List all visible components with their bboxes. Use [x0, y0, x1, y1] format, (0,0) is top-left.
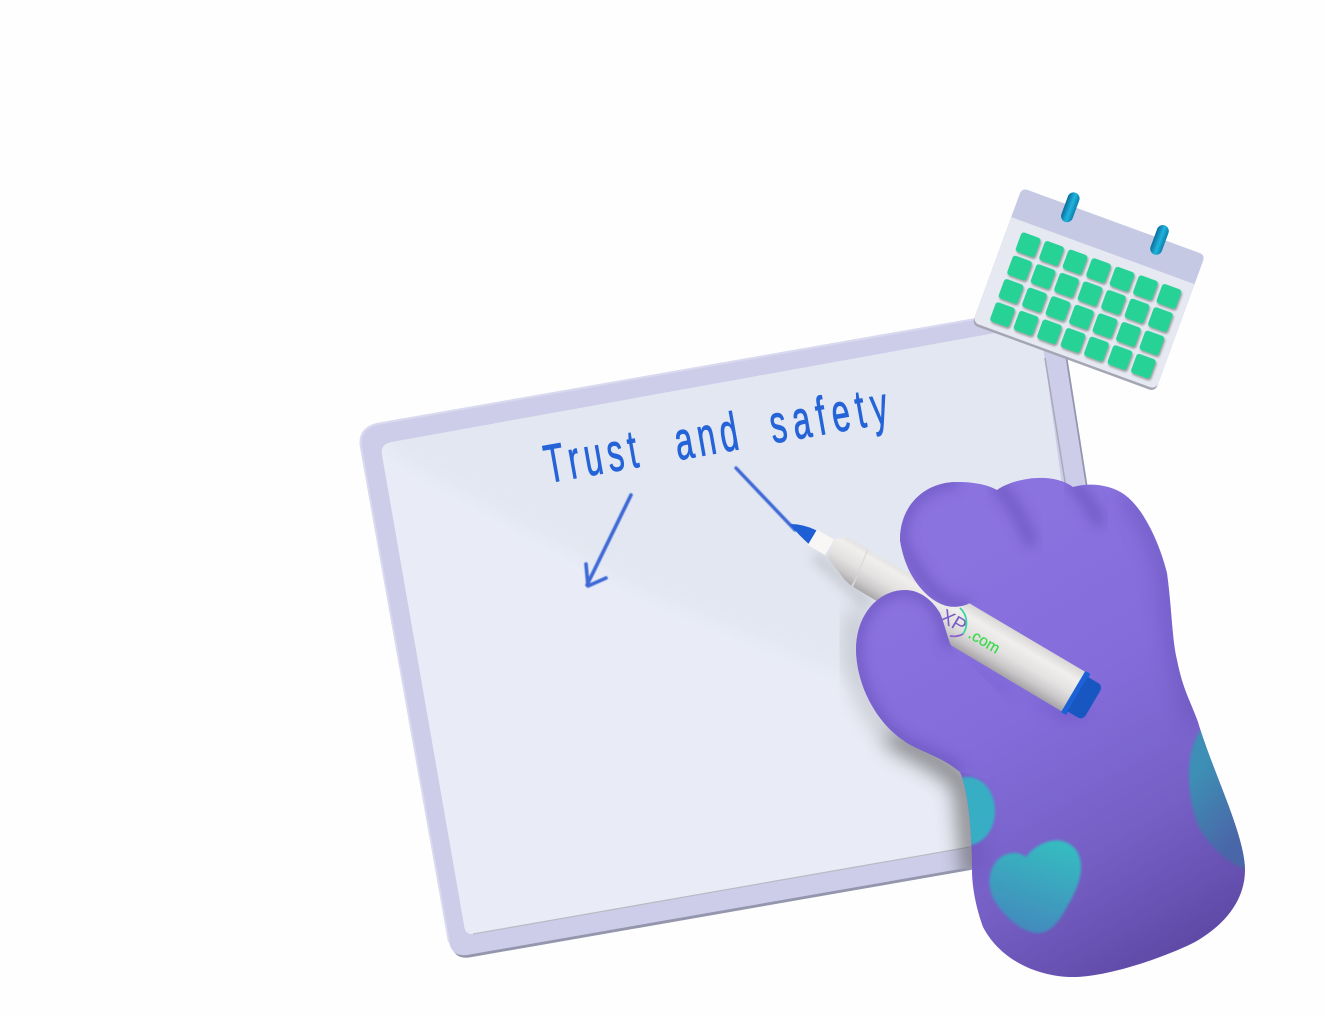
logo ring [960, 608, 966, 634]
calendar [972, 175, 1210, 392]
hand silhouette [856, 478, 1245, 977]
pen domain text: .com [965, 626, 1003, 657]
surface lower edge [473, 847, 970, 934]
right spot [1188, 729, 1245, 870]
arrow pointing down-left [586, 495, 631, 586]
board frame [360, 305, 1088, 955]
pen logo letters: XP [936, 605, 970, 638]
board surface [382, 325, 1083, 934]
left spot [962, 776, 996, 846]
handwritten title [540, 376, 893, 495]
pen barrel [847, 545, 1086, 712]
logo ring lower [950, 634, 963, 636]
handwritten title: safety [765, 376, 893, 455]
hand shadow lower [890, 735, 975, 880]
date grid [989, 232, 1182, 379]
hand shading and heart spots [960, 495, 1245, 934]
surface sheen and shadows [380, 300, 1110, 880]
pen nib [786, 517, 818, 545]
grip section [818, 531, 871, 586]
pen end cap [1067, 677, 1103, 720]
frame highlight [361, 306, 1050, 942]
pen shadow on board [815, 555, 870, 605]
thumb edge shading [856, 590, 960, 772]
thumb shadow [854, 610, 890, 735]
handwritten title: Trust [540, 420, 643, 495]
drawn ink line [736, 468, 795, 530]
whiteboard [360, 300, 1110, 958]
calendar edge shadow [972, 189, 1205, 392]
marker pen [736, 468, 1105, 724]
calendar header [1011, 188, 1205, 284]
pen cap flange [1061, 671, 1091, 715]
white collar [808, 529, 834, 555]
binder ring left [1059, 191, 1081, 224]
knuckle crease one [999, 488, 1030, 540]
calendar page [973, 188, 1205, 389]
pen body [778, 503, 1105, 724]
thumb [856, 590, 1020, 780]
grip step line [848, 550, 873, 587]
pen shadow on hand [1063, 714, 1064, 715]
handwritten title: and [670, 402, 743, 472]
illustration: hand writing on whiteboard [360, 190, 1245, 977]
knuckle crease two [1074, 486, 1098, 520]
binder ring right [1149, 223, 1170, 257]
board drop edge [362, 308, 1090, 958]
fingers over pen [856, 482, 1098, 780]
upper finger [900, 482, 1060, 610]
outer edge shading [960, 495, 1198, 858]
upper finger edge shading [900, 482, 970, 606]
heart spot [989, 840, 1081, 933]
right frame edge line [1045, 358, 1068, 500]
